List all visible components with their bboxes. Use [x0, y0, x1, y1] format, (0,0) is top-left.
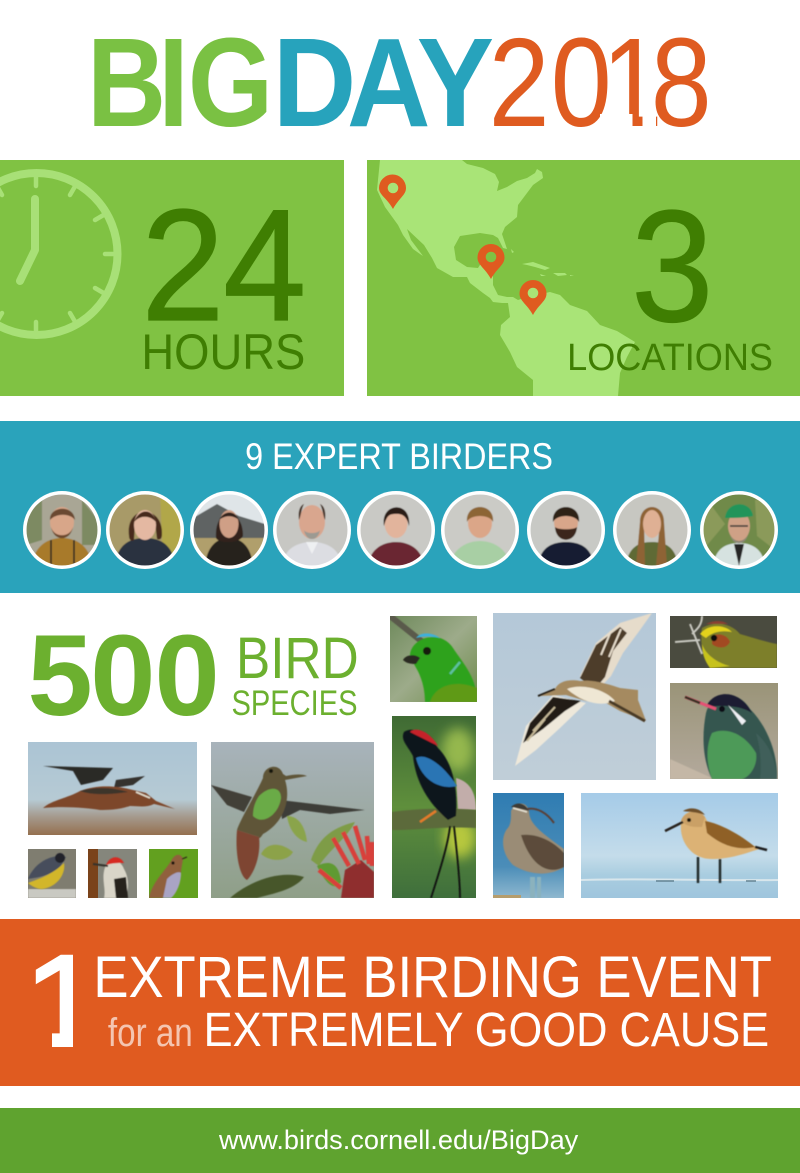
photo: white-eared hummingbird [670, 683, 778, 779]
portrait 9 [700, 491, 778, 569]
heading: 500 bird species [28, 611, 359, 740]
website url: www.birds.cornell.edu/BigDay [218, 1124, 579, 1155]
photo: whimbrel [493, 793, 564, 898]
photo: woodpecker [88, 849, 137, 898]
panel: extreme birding event [0, 919, 800, 1086]
photo: flying shorebird [493, 613, 656, 780]
number 24: 24 [141, 176, 306, 354]
line: extreme birding event: EXTREME BIRDING EVENT [93, 945, 772, 1010]
title: 2018 [489, 13, 712, 154]
map: Americas [377, 160, 635, 396]
icon: clock [0, 173, 118, 335]
line: extremely good cause: EXTREMELY GOOD CAUSE [204, 1003, 769, 1056]
line: for an: for an [108, 1010, 193, 1055]
label locations: LOCATIONS [567, 335, 773, 378]
pin: Colombia [520, 280, 546, 315]
pin: Mexico [478, 244, 504, 279]
title: BIG [87, 13, 273, 154]
portrait 1 [23, 491, 101, 569]
panel: 3 locations [367, 160, 800, 396]
portrait 8 [613, 491, 691, 569]
portrait 5 [357, 491, 435, 569]
number 3: 3 [631, 177, 713, 355]
photo: green bird [390, 616, 477, 702]
portrait 4 [273, 491, 351, 569]
photo: buff-breasted sandpiper [581, 793, 778, 898]
portrait 3 [190, 491, 268, 569]
photo: flying snipe [28, 742, 197, 835]
photo: warbler [670, 616, 777, 668]
panel: 24 hours [0, 160, 344, 396]
portrait 7 [527, 491, 605, 569]
heading: 500 bird species: SPECIES [232, 683, 357, 723]
photo: rufous-tailed hummingbird [211, 742, 374, 898]
heading: 9 expert birders: 9 EXPERT BIRDERS [245, 437, 553, 478]
photos: bird species [28, 613, 778, 898]
portrait 2 [106, 491, 184, 569]
title [94, 38, 707, 127]
photo: yellow-breasted bird [28, 849, 76, 898]
portrait 6 [441, 491, 519, 569]
panel: expert birders [0, 421, 800, 593]
number 1: 1 [26, 926, 106, 1076]
pin: California [379, 174, 406, 209]
photo: thrush on green [149, 849, 198, 898]
heading: 500 bird species: 500 [28, 611, 220, 740]
photo: long-tailed manakin [392, 716, 476, 898]
heading: 500 bird species: BIRD [236, 625, 359, 691]
footer [0, 1108, 800, 1173]
label hours: HOURS [141, 325, 305, 381]
title: DAY [273, 12, 494, 153]
